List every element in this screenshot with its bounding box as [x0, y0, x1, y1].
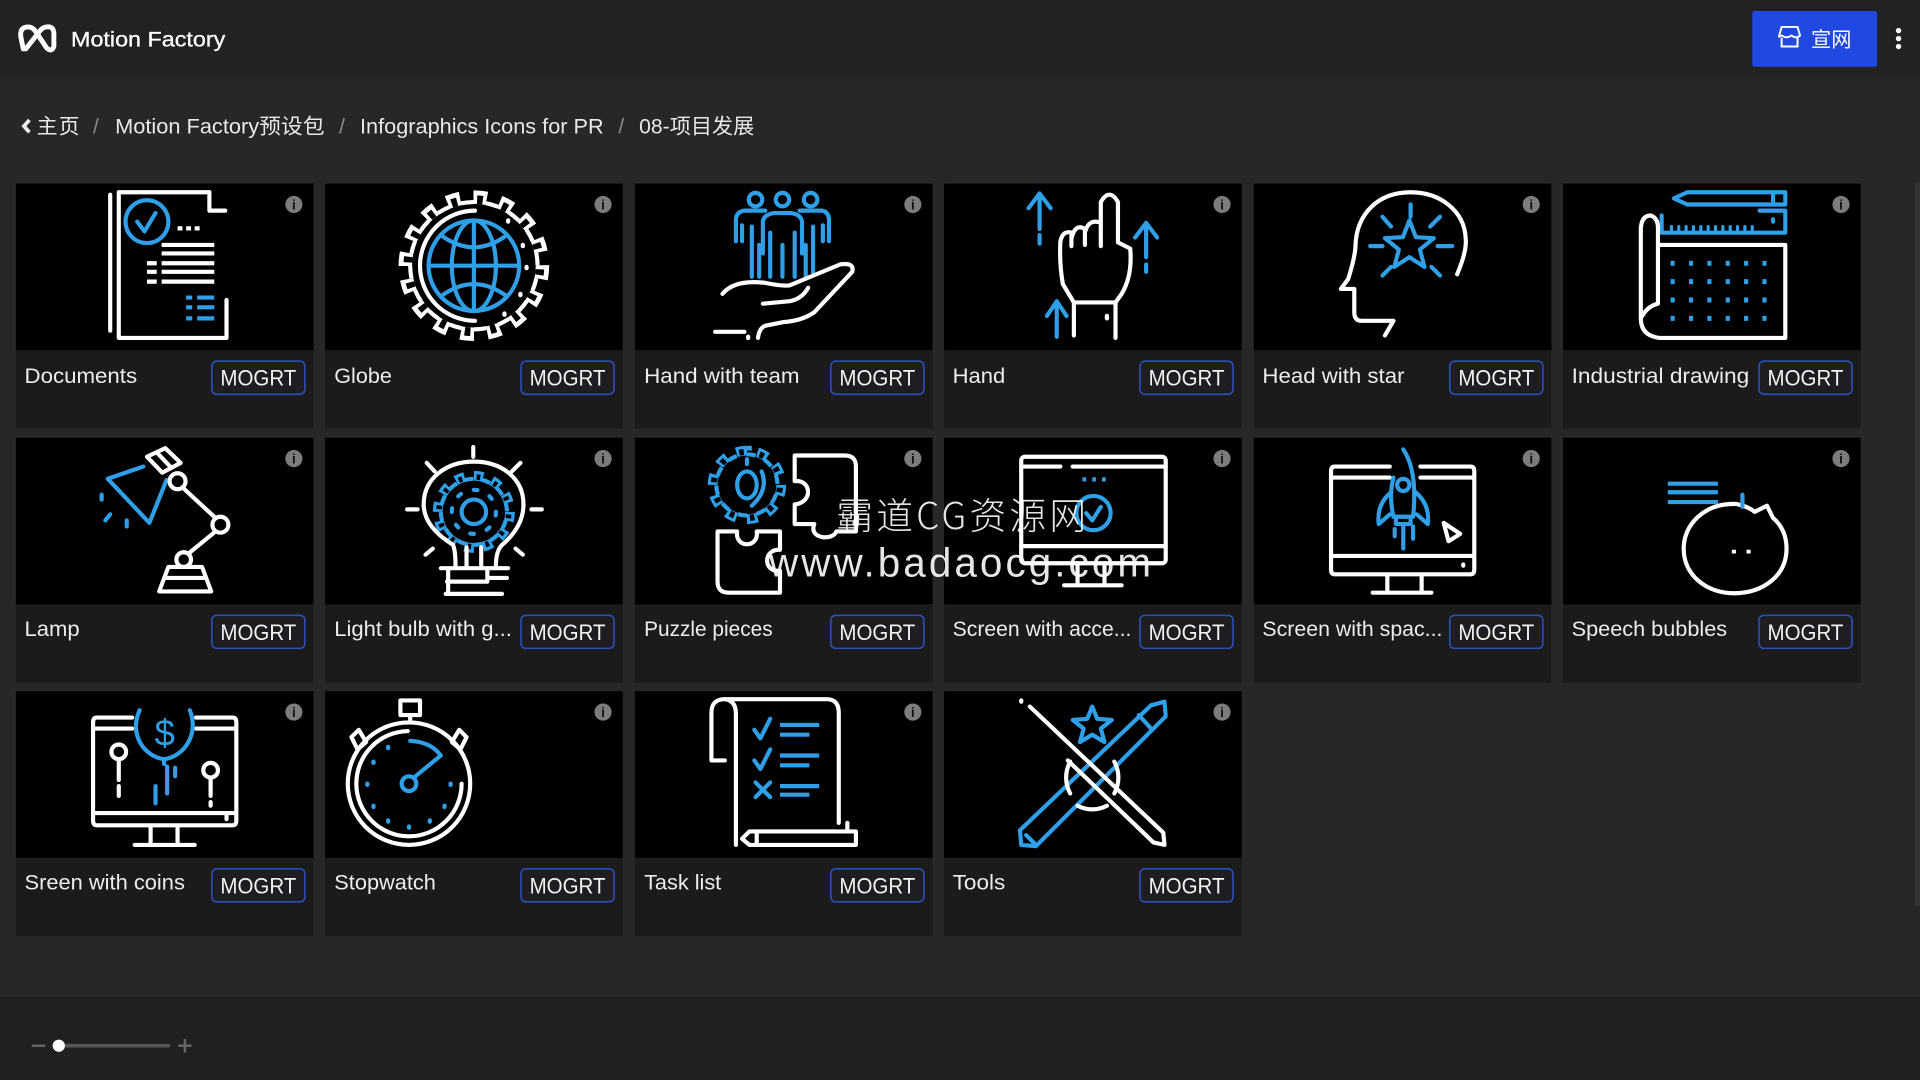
MOGRT button: MOGRT	[839, 366, 915, 391]
card name: Sreen with coins	[24, 872, 185, 895]
icon: hand with arrows	[1029, 193, 1157, 338]
MOGRT button	[212, 361, 305, 394]
MOGRT button	[1140, 869, 1233, 902]
breadcrumb: /	[93, 115, 99, 138]
button label: 宣网	[1811, 29, 1851, 52]
breadcrumb: 08-项目发展	[639, 115, 754, 138]
MOGRT button	[1759, 615, 1852, 648]
MOGRT button: MOGRT	[530, 873, 606, 898]
info icon: i	[1220, 705, 1224, 720]
card name: Screen with spac...	[1262, 618, 1442, 641]
icon: screen with coins	[93, 710, 236, 845]
info icon	[594, 196, 612, 213]
MOGRT button	[1140, 361, 1233, 394]
card name: Stopwatch	[334, 872, 436, 895]
icon: store	[1779, 27, 1800, 47]
info icon: i	[292, 197, 296, 212]
info icon	[285, 196, 302, 213]
info icon: i	[1529, 197, 1533, 212]
info icon	[904, 450, 921, 467]
icon: screen with spaceship	[1331, 449, 1474, 593]
card: Screen with access	[944, 438, 1242, 683]
breadcrumb: /	[618, 115, 624, 138]
card: Documents	[16, 184, 313, 429]
card: Speech bubbles	[1563, 438, 1861, 683]
dollar sign: $	[154, 713, 175, 754]
icon: speech bubbles	[1668, 484, 1787, 593]
info icon: i	[911, 451, 915, 466]
watermark	[768, 486, 1151, 586]
MOGRT button	[831, 615, 924, 648]
MOGRT button: MOGRT	[839, 620, 915, 645]
card: Industrial drawing	[1563, 184, 1861, 429]
watermark: www.badaocg.com	[768, 540, 1151, 586]
card name: Task list	[644, 872, 721, 895]
breadcrumb: Infographics Icons for PR	[360, 115, 604, 138]
card name: Light bulb with g...	[334, 618, 512, 641]
MOGRT button: MOGRT	[530, 366, 606, 391]
MOGRT button	[1759, 361, 1852, 394]
info icon	[1213, 450, 1231, 467]
info icon: i	[1220, 197, 1224, 212]
MOGRT button: MOGRT	[1149, 620, 1224, 645]
icon: lamp	[102, 448, 228, 591]
card name: Tools	[953, 872, 1005, 895]
info icon: i	[911, 197, 915, 212]
MOGRT button: MOGRT	[839, 873, 915, 898]
card name: Hand	[953, 365, 1005, 388]
MOGRT button: MOGRT	[1768, 620, 1843, 645]
breadcrumb: Motion Factory预设包	[115, 115, 324, 138]
info icon	[594, 703, 612, 721]
info icon: i	[1220, 451, 1224, 466]
card name: Hand with team	[644, 365, 800, 388]
card: Puzzle pieces	[635, 438, 932, 683]
info icon: i	[601, 197, 605, 212]
card name: Screen with acce...	[953, 618, 1131, 641]
MOGRT button	[521, 869, 614, 902]
MOGRT button: MOGRT	[220, 620, 296, 645]
info icon	[1523, 196, 1540, 213]
card: Lamp	[16, 438, 313, 683]
icon: industrial drawing	[1641, 192, 1785, 338]
MOGRT button: MOGRT	[530, 620, 606, 645]
card name: Speech bubbles	[1572, 618, 1727, 641]
card name: Documents	[24, 365, 137, 388]
MOGRT button	[212, 615, 305, 648]
MOGRT button	[831, 869, 924, 902]
icon: globe in gear	[405, 197, 542, 334]
MOGRT button: MOGRT	[1458, 366, 1534, 391]
info icon	[1213, 196, 1231, 213]
icon: screen with access	[1021, 457, 1166, 585]
info icon: i	[601, 705, 605, 720]
MOGRT button	[212, 869, 305, 902]
info icon	[285, 703, 302, 721]
watermark: 霸道CG资源网	[836, 486, 1086, 540]
info icon: i	[911, 705, 915, 720]
scrollbar	[1915, 182, 1920, 906]
MOGRT button	[831, 361, 924, 394]
info icon	[594, 450, 612, 467]
info icon	[1832, 196, 1850, 213]
card: Hand	[944, 184, 1242, 429]
info icon	[285, 450, 302, 467]
MOGRT button: MOGRT	[1149, 366, 1224, 391]
card: Head with star	[1254, 184, 1551, 429]
website button	[1752, 11, 1877, 67]
icon: task list	[711, 699, 856, 845]
info icon	[1213, 703, 1231, 721]
info icon: i	[601, 451, 605, 466]
info icon	[1832, 450, 1850, 467]
icon: documents	[110, 192, 227, 338]
info icon	[1523, 450, 1540, 467]
MOGRT button	[521, 361, 614, 394]
logo icon	[21, 27, 54, 50]
breadcrumb: 主页	[37, 115, 80, 138]
card name: Lamp	[24, 618, 80, 641]
card: Hand with team	[635, 184, 932, 429]
card: Task list	[635, 691, 932, 936]
card: Globe	[325, 184, 623, 429]
breadcrumb: /	[339, 115, 345, 138]
icon: light bulb with gear	[407, 447, 542, 594]
card name: Puzzle pieces	[644, 618, 773, 641]
MOGRT button: MOGRT	[1768, 366, 1843, 391]
info icon	[904, 703, 921, 721]
info icon: i	[1839, 197, 1843, 212]
icon: hand with team	[715, 193, 853, 338]
card: Tools	[944, 691, 1242, 936]
card: Stopwatch	[325, 691, 623, 936]
MOGRT button: MOGRT	[1458, 620, 1534, 645]
MOGRT button: MOGRT	[220, 873, 296, 898]
info icon: i	[1529, 451, 1533, 466]
icon: puzzle pieces	[713, 451, 856, 593]
zoom slider	[32, 1039, 192, 1052]
MOGRT button	[1450, 361, 1543, 394]
info icon: i	[1839, 451, 1843, 466]
card name: Head with star	[1262, 365, 1405, 388]
MOGRT button: MOGRT	[220, 366, 296, 391]
breadcrumb	[24, 115, 754, 138]
card name: Globe	[334, 365, 392, 388]
icon: tools	[1020, 700, 1166, 846]
MOGRT button	[1450, 615, 1543, 648]
MOGRT button	[521, 615, 614, 648]
info icon	[904, 196, 921, 213]
footer bar with zoom slider	[0, 997, 1920, 1080]
icon: head with star	[1341, 192, 1466, 336]
icon: stopwatch	[348, 700, 470, 845]
card: Screen with spaceship	[1254, 438, 1551, 683]
info icon: i	[292, 451, 296, 466]
info icon: i	[292, 705, 296, 720]
header bar	[0, 0, 1920, 76]
card: Sreen with coins	[16, 691, 313, 936]
MOGRT button	[1140, 615, 1233, 648]
more menu	[1896, 28, 1901, 49]
MOGRT button: MOGRT	[1149, 873, 1224, 898]
card: Light bulb with gear	[325, 438, 623, 683]
brand name: Motion Factory	[71, 28, 226, 52]
card name: Industrial drawing	[1572, 365, 1749, 388]
